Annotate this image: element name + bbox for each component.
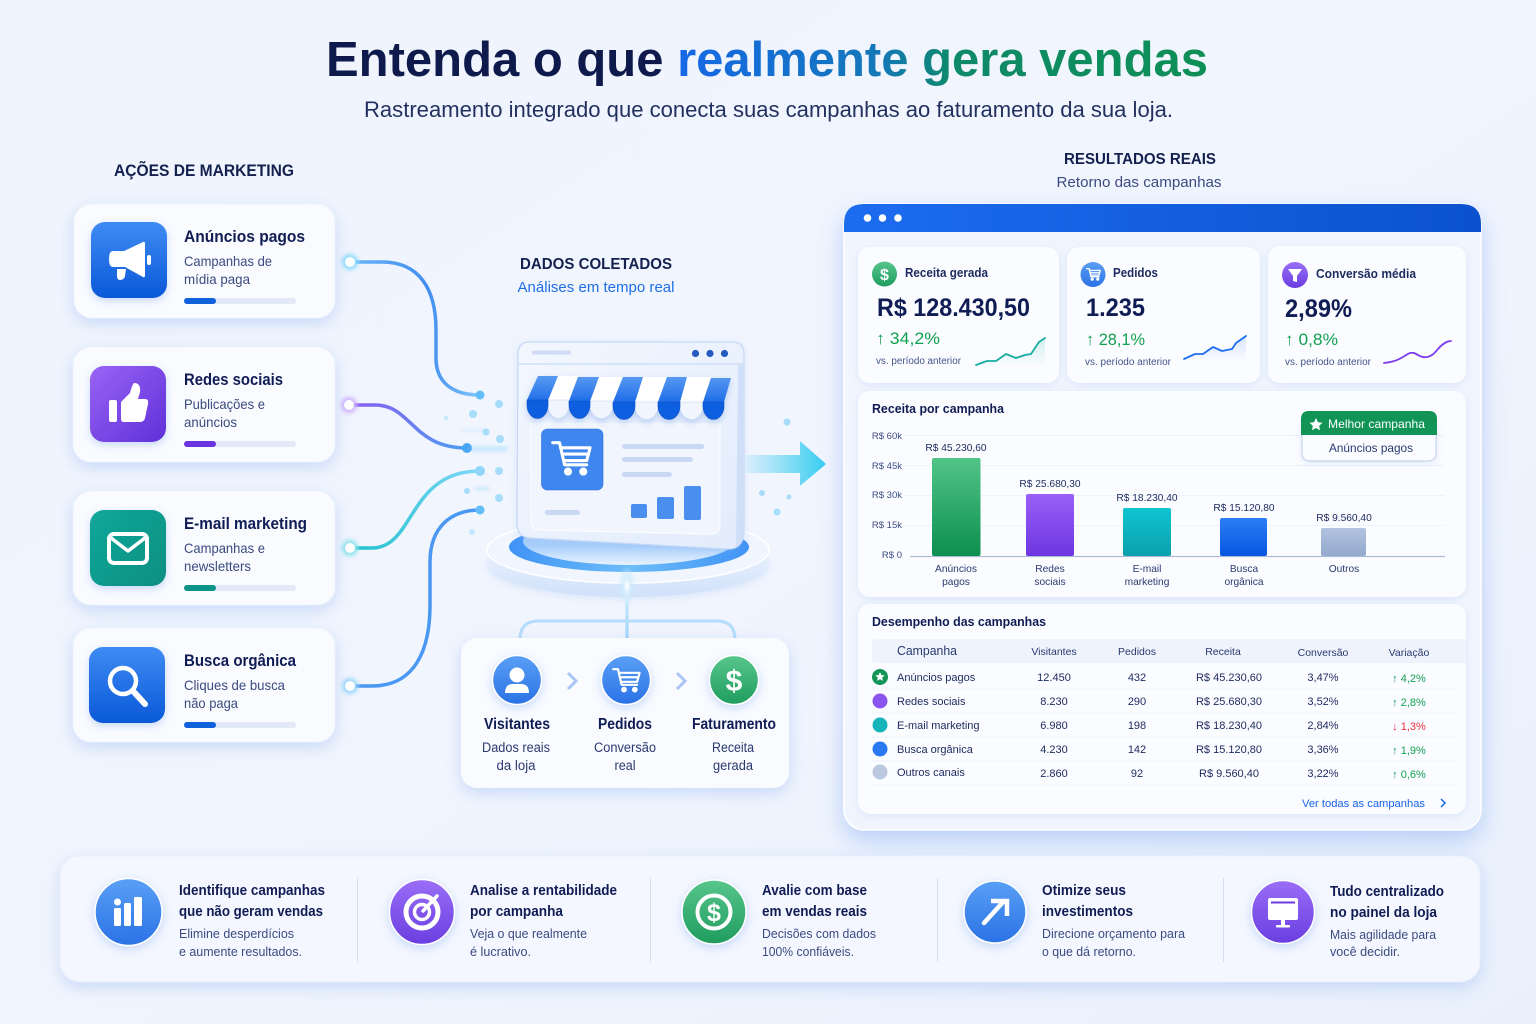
row: busca orgânica: ↑ 1,9%: [1392, 745, 1426, 757]
panel: desempenho das campanhas: Desempenho das campanhas: [872, 614, 1046, 629]
row: anúncios pagos: R$ 45.230,60: [1196, 672, 1262, 684]
step: faturamento: [692, 716, 776, 773]
bar: e-mail marketing: R$ 18.230,40: [1116, 493, 1178, 504]
panel: funil visitantes pedidos faturamento: [461, 638, 789, 788]
icon: faturamento: [710, 656, 758, 704]
card: redes sociais: Publicações e: [184, 396, 265, 412]
benefit: otimize seus investimentos: o que dá retorno.: [1042, 945, 1136, 959]
step: visitantes: da loja: [496, 758, 536, 773]
row: outros canais: ↑ 0,6%: [1392, 769, 1426, 781]
benefit: avalie com base: [682, 880, 876, 959]
benefit: analise a rentabilidade: é lucrativo.: [470, 945, 531, 959]
sparkline: [976, 338, 1045, 367]
kpi: pedidos: Pedidos: [1113, 266, 1158, 280]
benefit: avalie com base: em vendas reais: [762, 904, 867, 920]
icon: envelope: [90, 510, 166, 586]
row: busca orgânica: R$ 15.120,80: [1196, 744, 1262, 756]
row: redes sociais: 3,52%: [1307, 696, 1339, 708]
step: faturamento: Receita: [712, 740, 754, 755]
step: pedidos: Conversão: [594, 740, 656, 755]
row: e-mail marketing: 6.980: [1040, 720, 1068, 732]
axis labels: R$ 15k: [872, 520, 902, 531]
link: ver todas as campanhas: Ver todas as campanhas: [1302, 798, 1426, 810]
card: e-mail marketing: newsletters: [184, 558, 251, 574]
table header: Receita: [1205, 646, 1241, 658]
title: Entenda o que realmente gera vendas: [326, 33, 1208, 87]
storefront window: [517, 342, 744, 549]
row: outros canais: R$ 9.560,40: [1199, 768, 1259, 780]
kpi: conversão média: 2,89%: [1285, 295, 1352, 323]
icon: arrow up-right: [964, 881, 1026, 943]
benefit: otimize seus investimentos: [964, 881, 1185, 959]
bar: busca orgânica: orgânica: [1224, 577, 1264, 588]
table header: Variação: [1389, 647, 1429, 659]
heading: ações de marketing: AÇÕES DE MARKETING: [114, 160, 294, 180]
bar: anúncios pagos: [925, 443, 987, 588]
row: redes sociais: R$ 25.680,30: [1196, 696, 1262, 708]
benefit: otimize seus investimentos: Direcione orçamento para: [1042, 927, 1185, 941]
card: e-mail marketing: Campanhas e: [184, 540, 265, 556]
row: redes sociais: 8.230: [1040, 696, 1068, 708]
kpi: receita gerada: ↑ 34,2%: [876, 329, 940, 348]
card: anúncios pagos: Anúncios pagos: [184, 227, 305, 246]
benefit: otimize seus investimentos: investimentos: [1042, 904, 1133, 920]
step: pedidos: [594, 716, 656, 773]
card: busca orgânica: não paga: [184, 695, 238, 711]
axis labels: R$ 0: [882, 550, 902, 561]
heading: dados coletados: Análises em tempo real: [518, 279, 674, 296]
bar: outros: R$ 9.560,40: [1316, 513, 1372, 524]
card: redes sociais: Redes sociais: [184, 370, 283, 389]
kpi: pedidos: ↑ 28,1%: [1086, 330, 1145, 349]
row: busca orgânica: 3,36%: [1307, 744, 1339, 756]
kpi: pedidos: vs. período anterior: [1085, 357, 1172, 368]
icon: dollar: [872, 262, 897, 286]
step: pedidos: real: [614, 758, 636, 773]
row: e-mail marketing: 198: [1128, 720, 1146, 732]
card: e-mail marketing: [73, 491, 335, 605]
icon: visitantes: [492, 656, 542, 704]
kpi: conversão média: [1268, 246, 1466, 383]
card: anúncios pagos: Campanhas de: [184, 253, 272, 269]
row: e-mail marketing: E-mail marketing: [897, 720, 980, 732]
icon: funnel: [1282, 262, 1308, 288]
row: redes sociais: 290: [1128, 696, 1146, 708]
icon: pedidos cart: [602, 656, 650, 704]
step: visitantes: [482, 716, 550, 773]
panel: benefícios: [60, 856, 1480, 982]
bar: anúncios pagos: pagos: [942, 577, 970, 588]
card: anúncios pagos: mídia paga: [184, 271, 250, 287]
heading: resultados reais: Retorno das campanhas: [1056, 174, 1222, 191]
icon: cart: [1080, 262, 1106, 287]
panel: receita por campanha: [858, 391, 1466, 597]
step: pedidos: Pedidos: [598, 716, 652, 733]
kpi: receita gerada: R$ 128.430,50: [877, 294, 1030, 322]
kpi: pedidos: 1.235: [1086, 294, 1145, 322]
connector: redes sociais: [341, 397, 472, 453]
platform: [487, 517, 769, 597]
row: outros canais: 92: [1131, 768, 1143, 780]
axis labels: R$ 45k: [872, 461, 902, 472]
bar: redes sociais: R$ 25.680,30: [1019, 479, 1081, 490]
benefit: tudo centralizado: no painel da loja: [1330, 905, 1438, 921]
kpi: conversão média: vs. período anterior: [1285, 357, 1372, 368]
benefit: tudo centralizado: [1252, 880, 1444, 959]
browser bar: [532, 350, 728, 357]
benefit: avalie com base: Decisões com dados: [762, 927, 876, 941]
row: anúncios pagos: [872, 669, 1426, 685]
row: outros canais: 2.860: [1040, 768, 1068, 780]
card: e-mail marketing: E-mail marketing: [184, 514, 307, 533]
row: outros canais: 3,22%: [1307, 768, 1339, 780]
benefit: avalie com base: Avalie com base: [762, 883, 867, 899]
kpi: conversão média: ↑ 0,8%: [1285, 330, 1338, 349]
row: redes sociais: ↑ 2,8%: [1392, 697, 1426, 709]
table header: Conversão: [1298, 647, 1349, 659]
bar: busca orgânica: Busca: [1230, 564, 1258, 575]
row: e-mail marketing: R$ 18.230,40: [1196, 720, 1262, 732]
card: redes sociais: [73, 347, 335, 462]
benefit: tudo centralizado: Mais agilidade para: [1330, 928, 1436, 942]
sparkline: [1184, 336, 1246, 362]
step: visitantes: Visitantes: [484, 716, 550, 733]
benefit: tudo centralizado: Tudo centralizado: [1330, 884, 1444, 900]
heading: resultados reais: [1056, 151, 1222, 191]
icon: monitor: [1252, 880, 1314, 944]
bar: busca orgânica: R$ 15.120,80: [1213, 503, 1275, 514]
icon: dollar coin: [682, 880, 746, 944]
connector: e-mail marketing: [342, 466, 485, 556]
chevron: [677, 673, 685, 689]
bar: redes sociais: Redes: [1035, 564, 1065, 575]
kpi: pedidos: [1067, 247, 1260, 383]
row: redes sociais: Redes sociais: [897, 696, 966, 708]
card: busca orgânica: Busca orgânica: [184, 651, 296, 670]
heading: dados coletados: [518, 256, 674, 296]
benefit: identifique campanhas: que não geram vendas: [179, 904, 323, 920]
callout: melhor campanha: Anúncios pagos: [1329, 441, 1413, 455]
bar: anúncios pagos: R$ 45.230,60: [925, 443, 987, 454]
step: visitantes: Dados reais: [482, 740, 550, 755]
table header: Pedidos: [1118, 646, 1156, 658]
icon: cart: [553, 443, 590, 474]
row: redes sociais: [872, 694, 1426, 709]
panel: receita por campanha: Receita por campanha: [872, 401, 1005, 416]
axis labels: [872, 431, 902, 561]
bar: outros: [1316, 513, 1372, 575]
row: busca orgânica: 142: [1128, 744, 1146, 756]
table header: [872, 639, 1466, 663]
card: redes sociais: anúncios: [184, 414, 237, 430]
axis labels: R$ 60k: [872, 431, 902, 442]
subtitle: Rastreamento integrado que conecta suas campanhas ao faturamento da sua loja.: [364, 97, 1173, 122]
row: busca orgânica: Busca orgânica: [897, 744, 974, 756]
icon: magnifier: [89, 647, 165, 723]
row: e-mail marketing: 2,84%: [1307, 720, 1339, 732]
row: outros canais: [872, 764, 1426, 781]
row: anúncios pagos: Anúncios pagos: [897, 672, 976, 684]
benefit: identifique campanhas: Elimine desperdícios: [179, 927, 294, 941]
row: e-mail marketing: ↓ 1,3%: [1392, 721, 1426, 733]
row: anúncios pagos: 12.450: [1037, 672, 1071, 684]
row: busca orgânica: 4.230: [1040, 744, 1068, 756]
bar: redes sociais: sociais: [1034, 577, 1066, 588]
callout: melhor campanha: Melhor campanha: [1328, 417, 1425, 431]
kpi: receita gerada: vs. período anterior: [876, 356, 962, 367]
kpi: conversão média: Conversão média: [1316, 267, 1417, 281]
kpi: receita gerada: [858, 247, 1059, 383]
benefit: avalie com base: 100% confiáveis.: [762, 945, 854, 959]
step: faturamento: Faturamento: [692, 716, 776, 733]
bar: e-mail marketing: [1116, 493, 1178, 588]
connector: busca orgânica: [342, 506, 484, 694]
benefit: identifique campanhas: e aumente resultados.: [179, 945, 302, 959]
card: anúncios pagos: [74, 204, 335, 318]
arrow to dashboard: [745, 442, 826, 486]
chevron: [568, 673, 576, 689]
bar: e-mail marketing: marketing: [1125, 577, 1170, 588]
row: anúncios pagos: ↑ 4,2%: [1392, 673, 1426, 685]
awning: [527, 376, 731, 420]
bar: anúncios pagos: Anúncios: [935, 564, 977, 575]
benefit: analise a rentabilidade: por campanha: [470, 904, 564, 920]
table header: Visitantes: [1031, 646, 1077, 658]
row: busca orgânica: [872, 742, 1426, 757]
heading: dados coletados: DADOS COLETADOS: [520, 256, 672, 273]
card: busca orgânica: [73, 628, 335, 742]
icon: dollar: $: [880, 267, 889, 284]
bar: outros: Outros: [1329, 564, 1359, 575]
sparkline: [1384, 341, 1451, 363]
dashboard header: [844, 204, 1481, 232]
icon: dollar coin: $: [707, 899, 721, 927]
icon: target: [390, 880, 454, 944]
icon: thumbs up: [90, 366, 166, 442]
row: outros canais: Outros canais: [897, 767, 965, 779]
icon: faturamento: $: [726, 665, 743, 698]
row: anúncios pagos: 3,47%: [1307, 672, 1339, 684]
kpi: receita gerada: Receita gerada: [905, 266, 989, 280]
icon: megaphone: [91, 222, 167, 298]
row: anúncios pagos: 432: [1128, 672, 1146, 684]
card: busca orgânica: Cliques de busca: [184, 677, 285, 693]
connector: anúncios pagos: [342, 254, 484, 400]
panel: desempenho das campanhas: [858, 604, 1466, 814]
table header: Campanha: [897, 644, 957, 658]
icon: bar chart: [95, 878, 162, 946]
benefit: otimize seus investimentos: Otimize seus: [1042, 883, 1126, 899]
dashboard: [844, 204, 1481, 830]
row: e-mail marketing: [872, 718, 1426, 733]
data particles: [444, 400, 792, 535]
step: faturamento: gerada: [713, 758, 753, 773]
benefit: analise a rentabilidade: Veja o que realmente: [470, 927, 587, 941]
benefit: analise a rentabilidade: Analise a rentabilidade: [470, 883, 617, 899]
bar: redes sociais: [1019, 479, 1081, 588]
benefit: identifique campanhas: [95, 878, 325, 959]
branching connector: [520, 566, 735, 640]
callout: melhor campanha: [1301, 411, 1437, 461]
benefit: identifique campanhas: Identifique campanhas: [179, 883, 325, 899]
benefit: tudo centralizado: você decidir.: [1330, 945, 1400, 959]
benefit: analise a rentabilidade: [390, 880, 617, 959]
bar: busca orgânica: [1213, 503, 1275, 588]
heading: resultados reais: RESULTADOS REAIS: [1064, 151, 1216, 168]
content panel: [531, 424, 720, 534]
axis labels: R$ 30k: [872, 490, 902, 501]
bar: e-mail marketing: E-mail: [1133, 564, 1161, 575]
